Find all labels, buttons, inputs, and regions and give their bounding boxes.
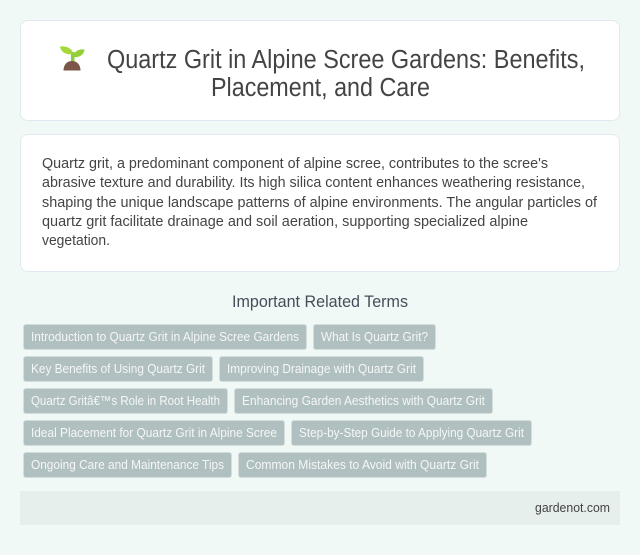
heading: important related terms: Important Related Terms <box>232 293 408 311</box>
tag <box>24 356 212 382</box>
tag: What Is Quartz Grit? <box>321 330 428 344</box>
title: Placement, and Care <box>211 74 430 102</box>
title <box>107 46 585 102</box>
tag <box>234 388 492 414</box>
tag: Common Mistakes to Avoid with Quartz Grit <box>246 458 479 472</box>
related terms tags <box>24 324 532 478</box>
description text: abrasive texture and durability. Its high silica content enhances weathering resistance, <box>42 175 585 191</box>
description text: shaping the unique landscape patterns of alpine environments. The angular particles of <box>42 195 598 211</box>
footer: gardenot.com <box>535 501 610 515</box>
description text: quartz grit facilitate drainage and soil aeration, supporting specialized alpine <box>42 214 528 230</box>
tag: Ongoing Care and Maintenance Tips <box>31 458 224 472</box>
description text <box>42 156 598 249</box>
tag <box>24 324 306 350</box>
tag: Improving Drainage with Quartz Grit <box>227 362 416 376</box>
tag <box>24 452 232 478</box>
tag <box>24 420 284 446</box>
description text: vegetation. <box>42 233 110 249</box>
icon: seedling <box>60 46 84 70</box>
tag <box>238 452 486 478</box>
tag: Step-by-Step Guide to Applying Quartz Grit <box>299 426 524 440</box>
tag: Enhancing Garden Aesthetics with Quartz Grit <box>242 394 485 408</box>
tag: Introduction to Quartz Grit in Alpine Scree Gardens <box>31 330 299 344</box>
title: Quartz Grit in Alpine Scree Gardens: Benefits, <box>107 46 585 74</box>
tag <box>314 324 436 350</box>
description text: Quartz grit, a predominant component of alpine scree, contributes to the scree's <box>42 156 548 172</box>
tag <box>24 388 228 414</box>
tag <box>292 420 532 446</box>
panel: title card <box>20 20 620 120</box>
tag <box>220 356 424 382</box>
tag: Ideal Placement for Quartz Grit in Alpine Scree <box>31 426 277 440</box>
panel: description <box>20 134 620 272</box>
tag: Key Benefits of Using Quartz Grit <box>31 362 205 376</box>
tag: Quartz Gritâ€™s Role in Root Health <box>31 394 220 408</box>
footer <box>20 491 620 525</box>
